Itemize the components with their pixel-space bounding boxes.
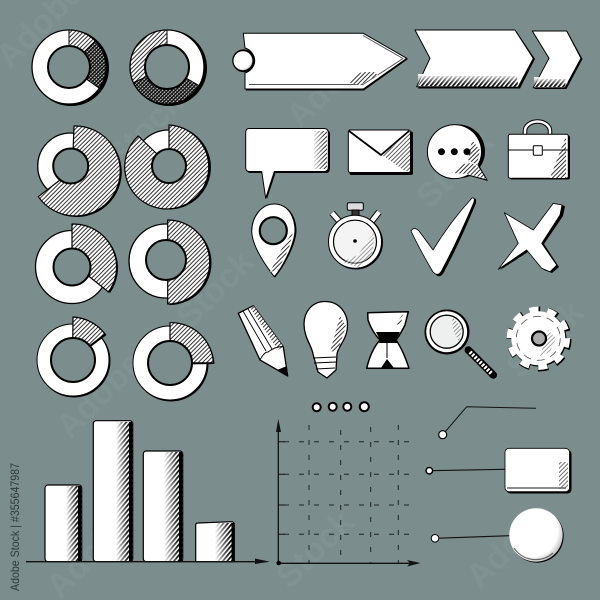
tag arrow banner: [232, 33, 408, 90]
icon: magnifying glass: [424, 310, 493, 375]
bar 2: [93, 421, 133, 562]
watermarks: Stock: [169, 243, 261, 336]
donut 1: [32, 30, 106, 104]
watermarks: Stock: [99, 83, 191, 176]
line grid chart: [276, 419, 420, 566]
watermarks: Adobe: [279, 34, 380, 136]
icon: map pin: [252, 204, 296, 278]
callout: circle: [431, 508, 564, 563]
icon: speech bubble: [246, 128, 330, 199]
donut 8: [133, 323, 214, 402]
bar 1: [45, 485, 82, 562]
bar chart axis: [26, 558, 270, 564]
callout: line: [439, 407, 536, 439]
donut 7: [37, 317, 110, 398]
pagination dots: [312, 401, 370, 412]
icon: chat bubble: [427, 124, 488, 181]
panel: arrows banners: [232, 30, 582, 90]
donut 2: [130, 30, 204, 104]
bar 3: [143, 451, 183, 562]
icon: stopwatch: [328, 203, 383, 270]
watermarks: Adobe: [49, 344, 150, 446]
axes: [276, 419, 420, 566]
icon: hourglass: [367, 312, 409, 368]
icon: gear: [509, 309, 568, 368]
panel: symbols row: [252, 198, 565, 278]
watermarks: Stock: [269, 503, 361, 596]
grid lines: [284, 425, 410, 563]
donut 5: [36, 224, 118, 304]
tag ball: [232, 49, 255, 72]
panel: donut charts: [32, 30, 214, 401]
icon: light bulb: [304, 302, 348, 378]
watermarks: Stock: [499, 293, 591, 386]
small chevron: [532, 31, 582, 89]
watermarks: Adobe: [459, 494, 560, 596]
panel: communication icons: [246, 122, 570, 199]
donut 6: [129, 220, 212, 305]
icon: briefcase: [508, 122, 570, 180]
callout: rectangle: [425, 448, 572, 494]
bar 4: [196, 522, 234, 562]
chat dots: [438, 148, 470, 155]
large chevron: [415, 30, 535, 88]
callouts: [425, 407, 572, 563]
watermarks: Stock: [409, 123, 501, 216]
panel: tool icons: [238, 302, 568, 378]
icon: check mark: [411, 198, 476, 276]
donut 4: [125, 125, 211, 209]
bar chart: [26, 421, 270, 564]
donut 3: [38, 126, 122, 217]
icon: cross mark: [498, 203, 565, 273]
icon: pencil: [238, 306, 288, 376]
icon: envelope: [348, 130, 413, 175]
stock id text: Adobe Stock | #355647987: [8, 463, 22, 591]
